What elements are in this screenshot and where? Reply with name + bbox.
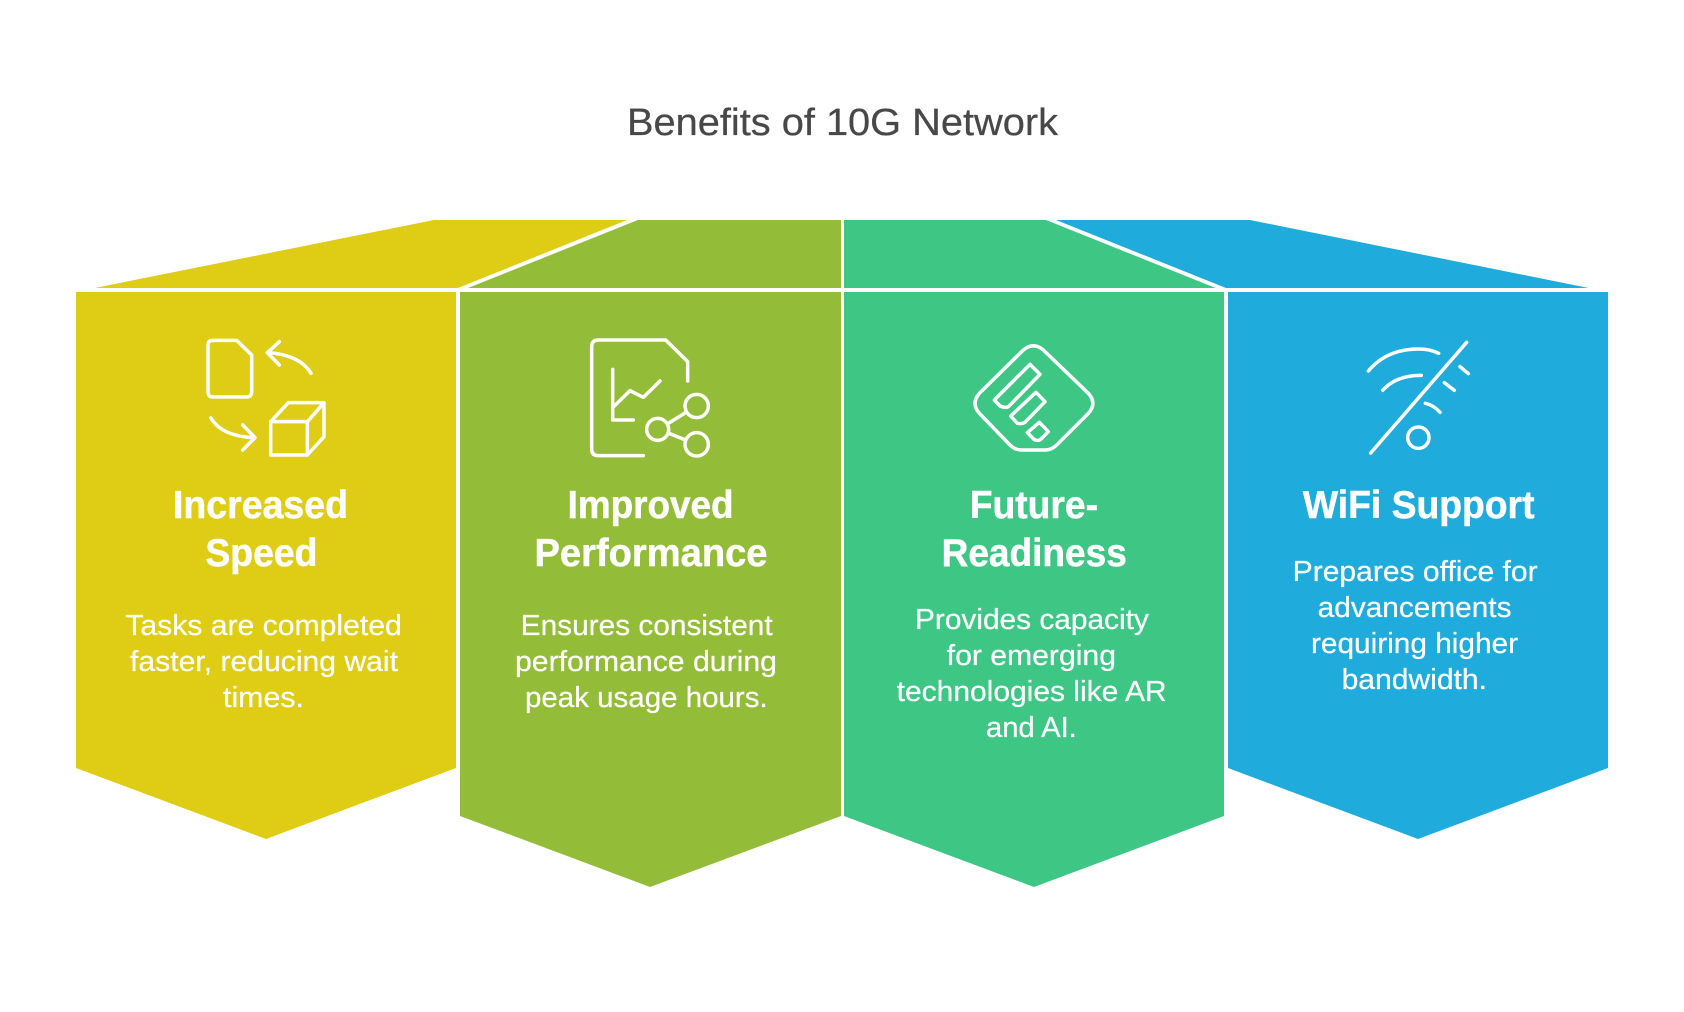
description: Tasks are completed [125, 610, 402, 642]
heading: Improved [568, 484, 734, 527]
description: technologies like AR [897, 676, 1167, 708]
banner: yellow [76, 292, 456, 839]
icon: document and cube exchange [208, 340, 324, 455]
title: Benefits of 10G Network [627, 102, 1059, 144]
description [1293, 556, 1538, 696]
icon: report chart with share nodes [592, 340, 708, 456]
description: peak usage hours. [525, 682, 768, 714]
heading [173, 484, 348, 575]
description [515, 610, 777, 714]
heading: Performance [534, 532, 768, 575]
heading: WiFi Support [1303, 484, 1535, 527]
description: advancements [1318, 592, 1512, 624]
roof: blue [1056, 220, 1589, 288]
heading [534, 484, 768, 575]
panel: increased speed [76, 220, 627, 839]
banner: blue [1228, 292, 1608, 839]
heading: Increased [173, 484, 348, 527]
description: requiring higher [1311, 628, 1518, 660]
description: performance during [515, 646, 777, 678]
description [897, 604, 1167, 744]
icon: wifi slashed [1368, 342, 1468, 453]
heading: Readiness [942, 532, 1127, 575]
roof: green [468, 220, 841, 288]
roof: yellow [95, 220, 627, 288]
panel: future-readiness [844, 220, 1224, 887]
description: bandwidth. [1342, 664, 1487, 696]
description: Provides capacity [915, 604, 1149, 636]
description: faster, reducing wait [130, 646, 398, 678]
icon: rotated feed tag [975, 346, 1093, 450]
heading: Future- [970, 484, 1098, 527]
description: Prepares office for [1293, 556, 1538, 588]
heading [942, 484, 1127, 575]
panel: improved performance [460, 220, 841, 887]
description: for emerging [947, 640, 1116, 672]
description: Ensures consistent [521, 610, 773, 642]
banner: teal [844, 292, 1224, 887]
banner: green [460, 292, 841, 887]
heading: Speed [205, 532, 317, 575]
panel: wifi support [1056, 220, 1608, 839]
description: and AI. [986, 712, 1077, 744]
roof: teal [844, 220, 1216, 288]
description: times. [223, 682, 304, 714]
description [125, 610, 402, 714]
